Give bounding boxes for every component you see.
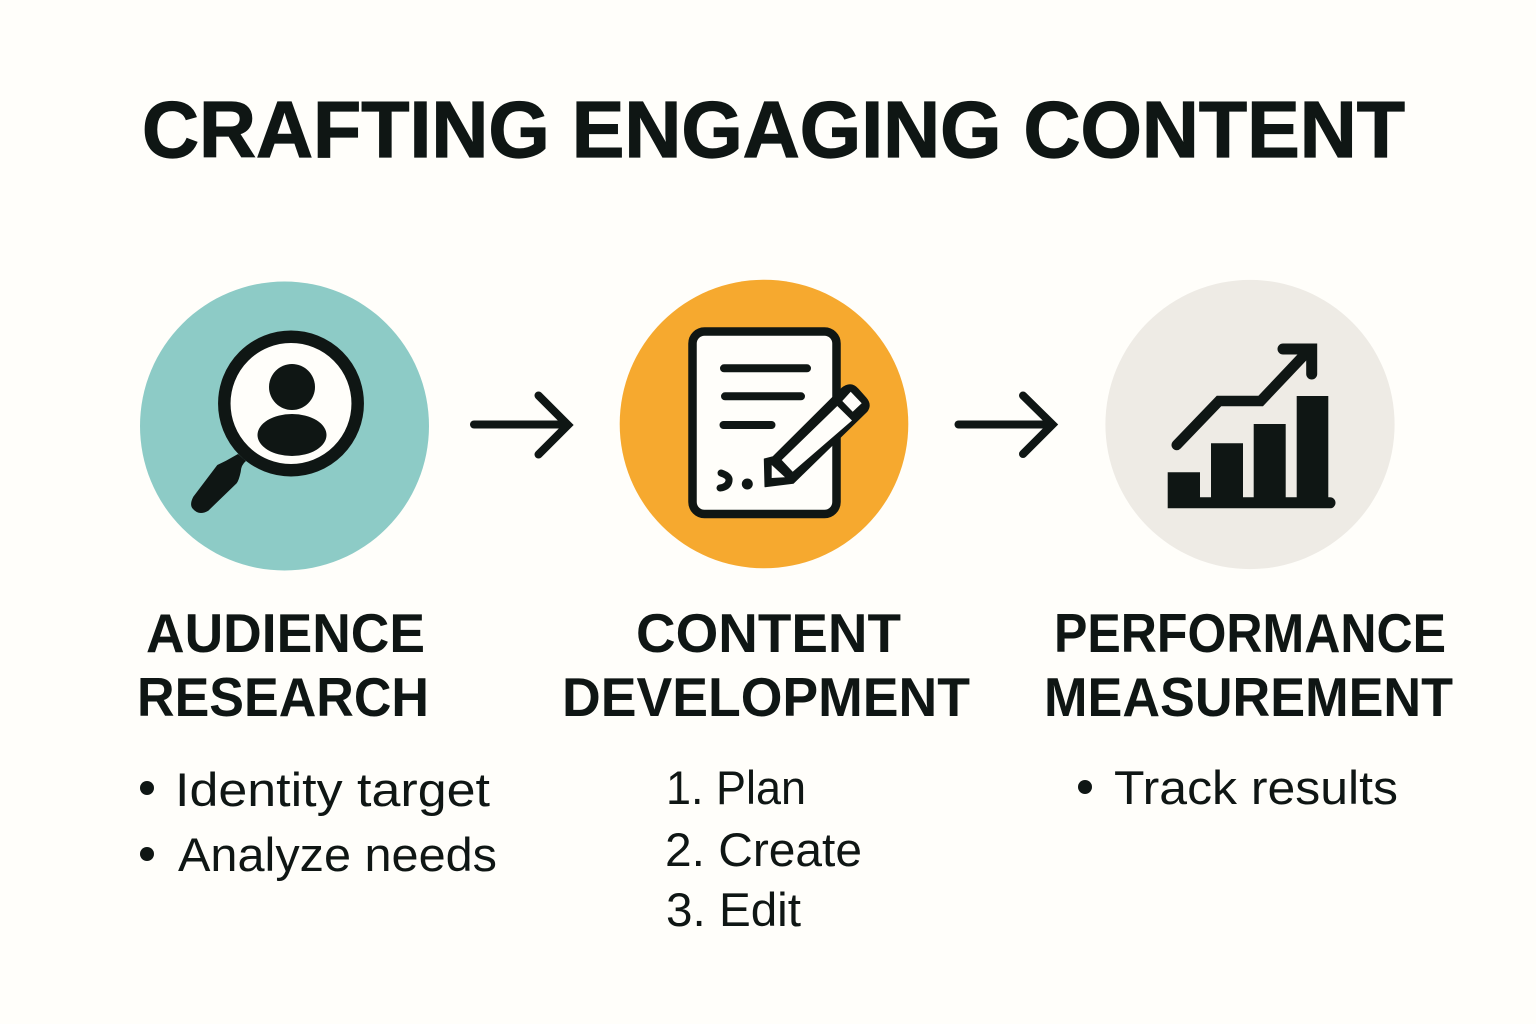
heading: performance measurement: [1044, 602, 1453, 728]
heading: content development: [562, 602, 970, 728]
heading: content development: DEVELOPMENT: [562, 666, 970, 728]
arrow: development to measurement: [958, 396, 1052, 454]
numbered list: content development: [665, 761, 862, 936]
bullet list: audience research: Analyze needs: [178, 828, 497, 881]
heading: audience research: RESEARCH: [137, 666, 429, 728]
bullet list: performance measurement: Track results: [1114, 761, 1398, 814]
panel: performance measurement: [1044, 280, 1453, 814]
bullet list: audience research: Identity target: [175, 763, 490, 816]
title: CRAFTING ENGAGING CONTENT: [142, 85, 1405, 174]
numbered list: content development: 3. Edit: [666, 883, 801, 936]
panel: content development: [562, 280, 970, 936]
numbered list: content development: 2. Create: [665, 823, 862, 876]
icon: rising bar chart on grey circle: [1105, 280, 1395, 569]
panel: audience research: [137, 282, 497, 881]
heading: audience research: AUDIENCE: [146, 602, 425, 664]
arrow: research to development: [474, 396, 568, 454]
bullet list: audience research: [140, 763, 497, 881]
icon: document with pencil on orange circle: [620, 280, 908, 568]
numbered list: content development: 1. Plan: [666, 761, 806, 814]
icon: magnifying glass over person on teal circle: [140, 282, 429, 570]
heading: performance measurement: PERFORMANCE: [1054, 602, 1446, 664]
heading: performance measurement: MEASUREMENT: [1044, 666, 1453, 728]
heading: content development: CONTENT: [636, 602, 901, 664]
heading: audience research: [137, 602, 429, 728]
